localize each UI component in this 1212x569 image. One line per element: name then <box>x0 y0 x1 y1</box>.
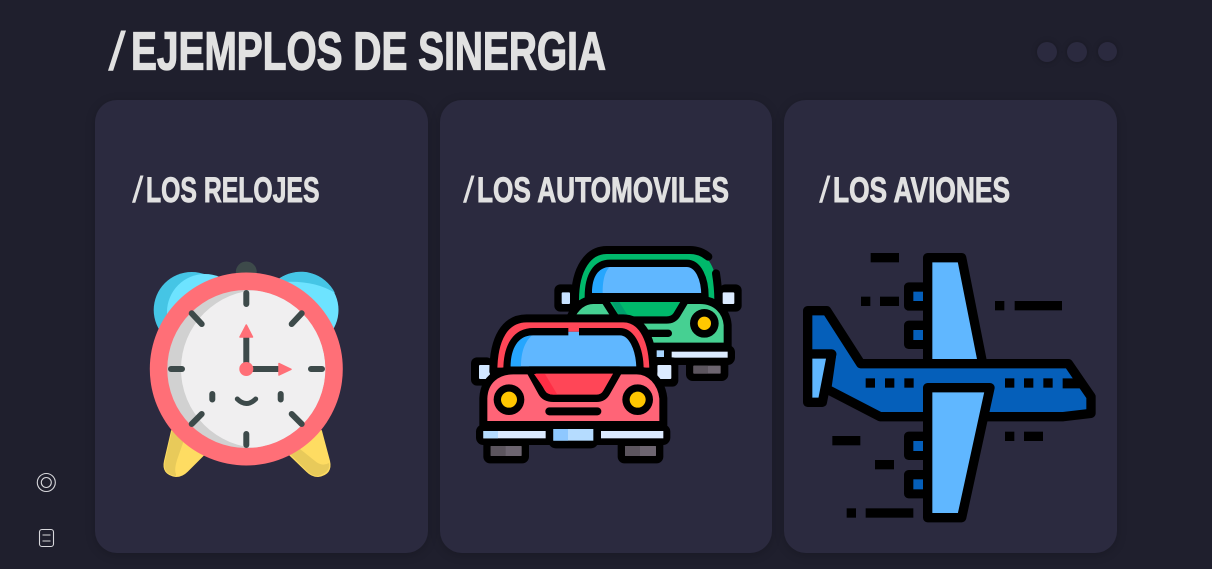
icon: alarm clock <box>150 262 343 477</box>
icon: cars <box>471 246 742 464</box>
heading: los automoviles: / <box>463 170 475 210</box>
heading: los aviones: / <box>819 170 831 210</box>
panel: los relojes <box>95 100 428 553</box>
title: / <box>108 20 127 82</box>
icon: document navigation <box>38 529 54 547</box>
green car <box>554 250 742 381</box>
icon: target navigation <box>36 473 56 492</box>
red car <box>471 318 678 463</box>
panel: los automoviles <box>440 100 772 553</box>
heading: los relojes: / <box>132 170 144 210</box>
panel: los aviones <box>784 100 1117 553</box>
icon: airplane <box>803 253 1096 522</box>
window dots <box>1037 42 1117 62</box>
